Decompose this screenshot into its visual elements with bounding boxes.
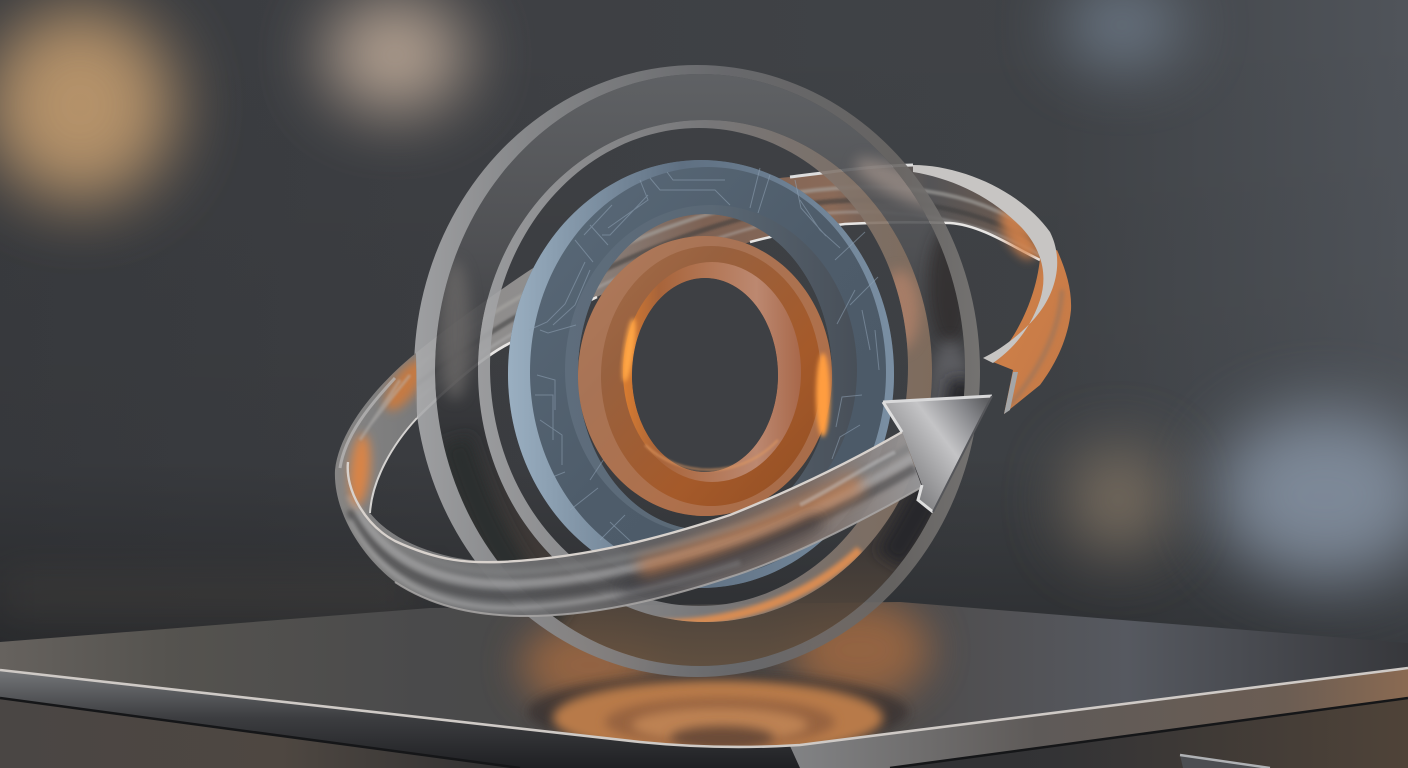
outer rim of the blue ring (508, 160, 894, 588)
arrow ribbon: front sweep with arrowhead (335, 353, 992, 616)
inner rim of the blue ring (565, 205, 857, 535)
bokeh light: blue top right (1062, 0, 1182, 65)
orange ring (578, 236, 832, 516)
copper pale outer rim (578, 236, 832, 516)
arrow head (883, 396, 992, 512)
ring outer rim (414, 65, 980, 677)
ring body highlights (439, 149, 972, 620)
arrow tail: bright strip and copper face (913, 165, 1071, 414)
bokeh light: beige top (323, 0, 467, 113)
arrow ribbon: rear band passing behind the rings (416, 165, 1057, 418)
large glass ring (414, 65, 980, 677)
copper inner wall (623, 262, 801, 482)
table reflection (520, 600, 930, 756)
ribbon highlight edges (348, 432, 902, 562)
ring inner rim (478, 120, 932, 622)
copper right glow (816, 353, 830, 437)
bokeh light: tan right (1070, 450, 1166, 550)
bokeh light: blue right (1215, 410, 1408, 580)
ribbon streaks (347, 354, 915, 608)
ring bottom glow arc (590, 270, 920, 624)
blue circuit ring (508, 160, 894, 588)
circuit traces (529, 168, 879, 550)
bokeh light: amber left (0, 7, 175, 203)
table (0, 600, 1408, 768)
copper left glow (620, 318, 638, 382)
